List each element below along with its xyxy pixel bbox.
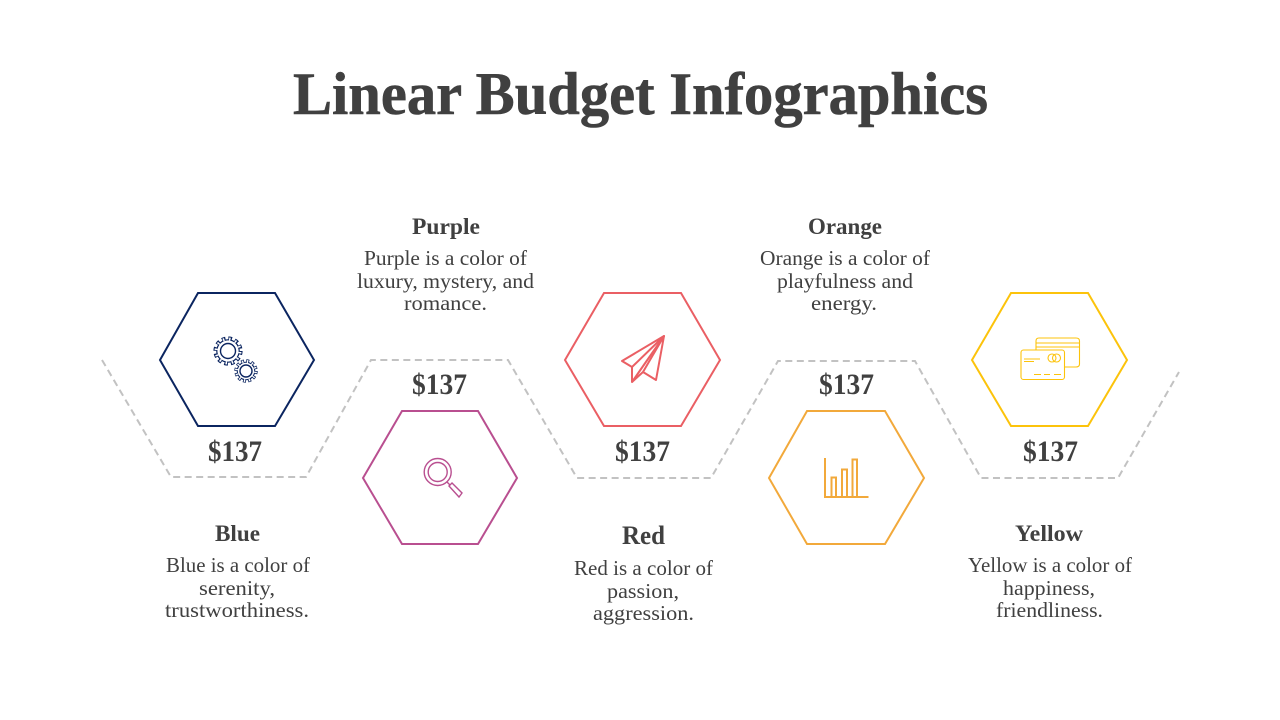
panel: yellow [968,293,1132,622]
dashed timeline [102,360,1179,478]
icon: magnifier [424,458,462,497]
red hexagon [565,293,720,426]
red description: passion, [607,579,679,603]
panel: red [565,293,720,625]
orange hexagon [769,411,924,544]
icon: bar chart [825,458,868,497]
blue description [165,553,310,622]
yellow amount: $137 [1023,435,1078,468]
icon: paper plane [622,336,664,382]
purple heading: Purple [412,214,480,239]
icon: credit cards [1021,338,1080,380]
yellow description [968,553,1132,622]
yellow hexagon [972,293,1127,426]
orange heading: Orange [808,214,882,239]
icon: gears [216,338,256,381]
orange description: Orange is a color of [760,246,930,270]
red heading: Red [622,521,666,550]
purple description: luxury, mystery, and [357,269,535,293]
yellow heading: Yellow [1015,521,1083,546]
blue heading: Blue [215,521,260,546]
orange description: playfulness and [777,269,914,293]
title: Linear Budget Infographics [293,61,988,127]
red description [574,556,713,625]
purple description: Purple is a color of [364,246,527,270]
red description: aggression. [593,601,694,625]
blue amount: $137 [208,435,262,468]
panel: purple [357,214,535,544]
blue description: trustworthiness. [165,598,309,622]
purple hexagon [363,411,517,544]
blue description: Blue is a color of [166,553,310,577]
blue hexagon [160,293,314,426]
yellow description: friendliness. [996,598,1103,622]
purple amount: $137 [412,368,467,401]
purple description [357,246,535,315]
panel: blue [160,293,314,622]
panel: orange [760,214,930,544]
red description: Red is a color of [574,556,713,580]
blue description: serenity, [199,576,275,600]
orange amount: $137 [819,368,874,401]
orange description: energy. [811,291,877,315]
orange description [760,246,930,315]
yellow description: Yellow is a color of [968,553,1132,577]
red amount: $137 [615,435,670,468]
yellow description: happiness, [1003,576,1095,600]
purple description: romance. [404,291,487,315]
